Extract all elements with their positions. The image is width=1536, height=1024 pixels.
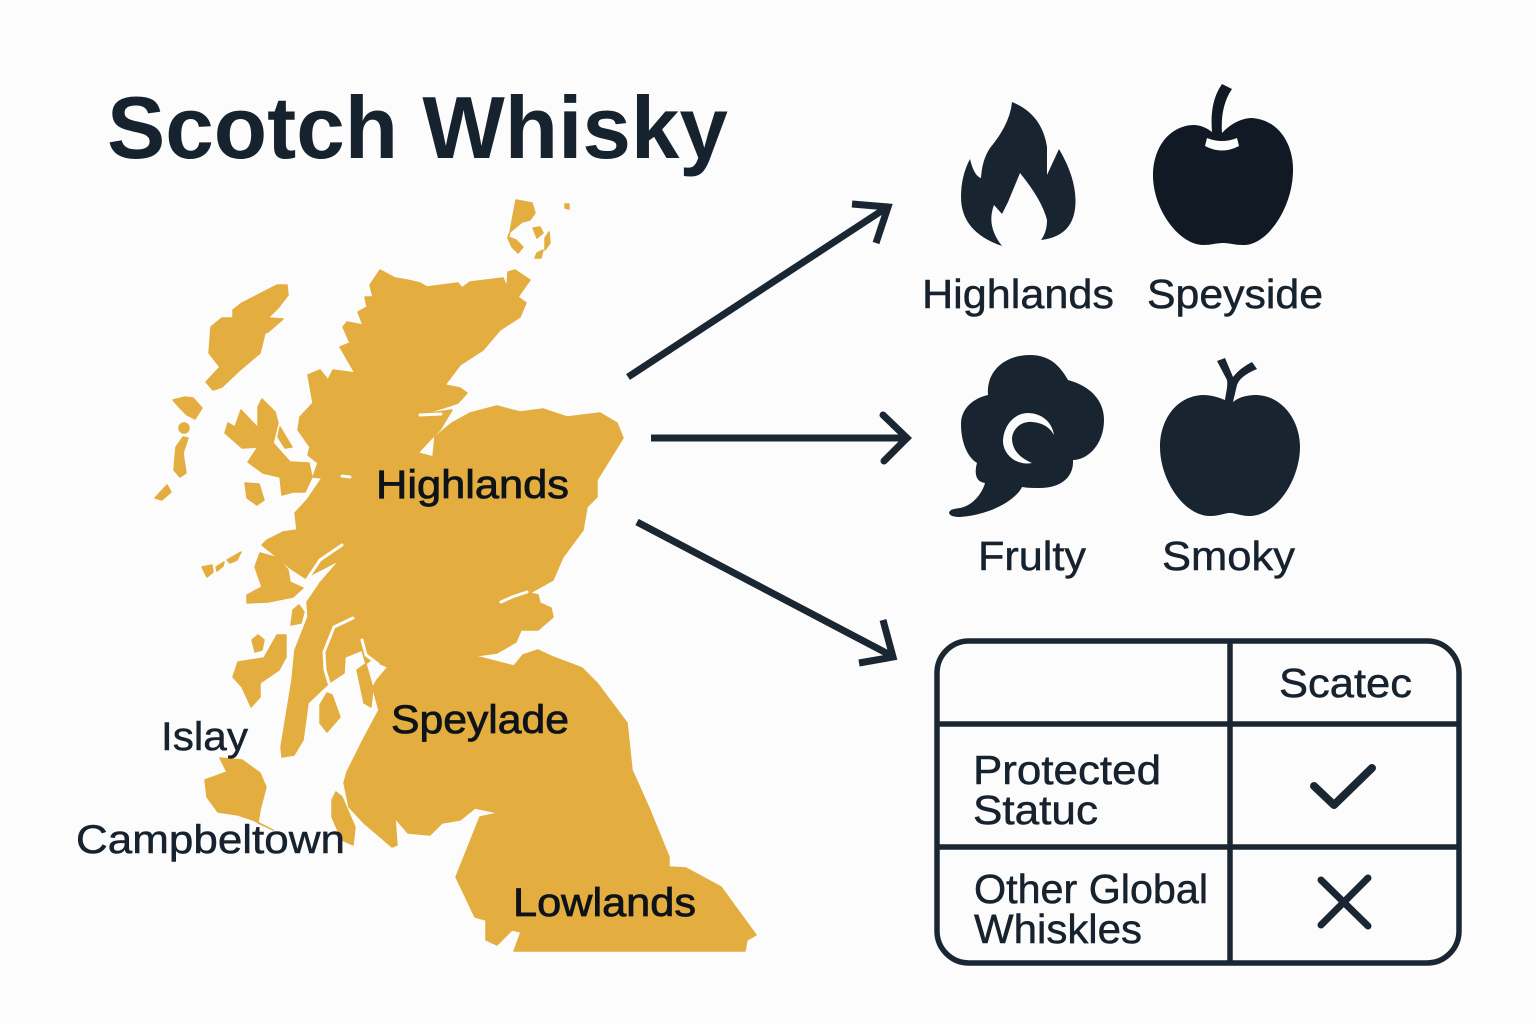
row: other global whiskies: Whiskles xyxy=(974,906,1142,952)
label: Highlands: Highlands xyxy=(922,271,1114,317)
comparison table xyxy=(937,641,1459,963)
row: protected status: Statuc xyxy=(973,787,1098,833)
map of Scotland xyxy=(155,200,756,951)
map sea lochs xyxy=(308,414,527,683)
icon: smoke cloud xyxy=(949,355,1104,517)
map region labels: Highlands xyxy=(376,463,569,507)
row: protected status: Protected xyxy=(973,747,1161,793)
label: Speyside: Speyside xyxy=(1147,271,1323,317)
arrow: to top icons xyxy=(628,204,888,377)
map region labels: Speylade xyxy=(391,698,569,742)
map region labels xyxy=(76,463,696,925)
map region labels: Lowlands xyxy=(513,881,696,925)
arrow: to middle icons xyxy=(651,415,907,461)
title: Scotch Whisky xyxy=(107,78,728,177)
label: Smoky: Smoky xyxy=(1162,533,1296,579)
table header: Scatec xyxy=(1279,660,1412,706)
label: Frulty: Frulty xyxy=(978,533,1087,579)
icon: cross mark xyxy=(1321,878,1368,926)
row: other global whiskies: Other Global xyxy=(974,866,1208,912)
map region labels: Islay xyxy=(161,715,248,759)
icon: check mark xyxy=(1314,768,1372,805)
icon: apple with leaf stem xyxy=(1160,358,1300,516)
icon: apple with stem xyxy=(1153,84,1293,245)
icon: flame xyxy=(961,102,1076,246)
map region labels: Campbeltown xyxy=(76,818,345,862)
arrow: to table xyxy=(637,522,893,663)
